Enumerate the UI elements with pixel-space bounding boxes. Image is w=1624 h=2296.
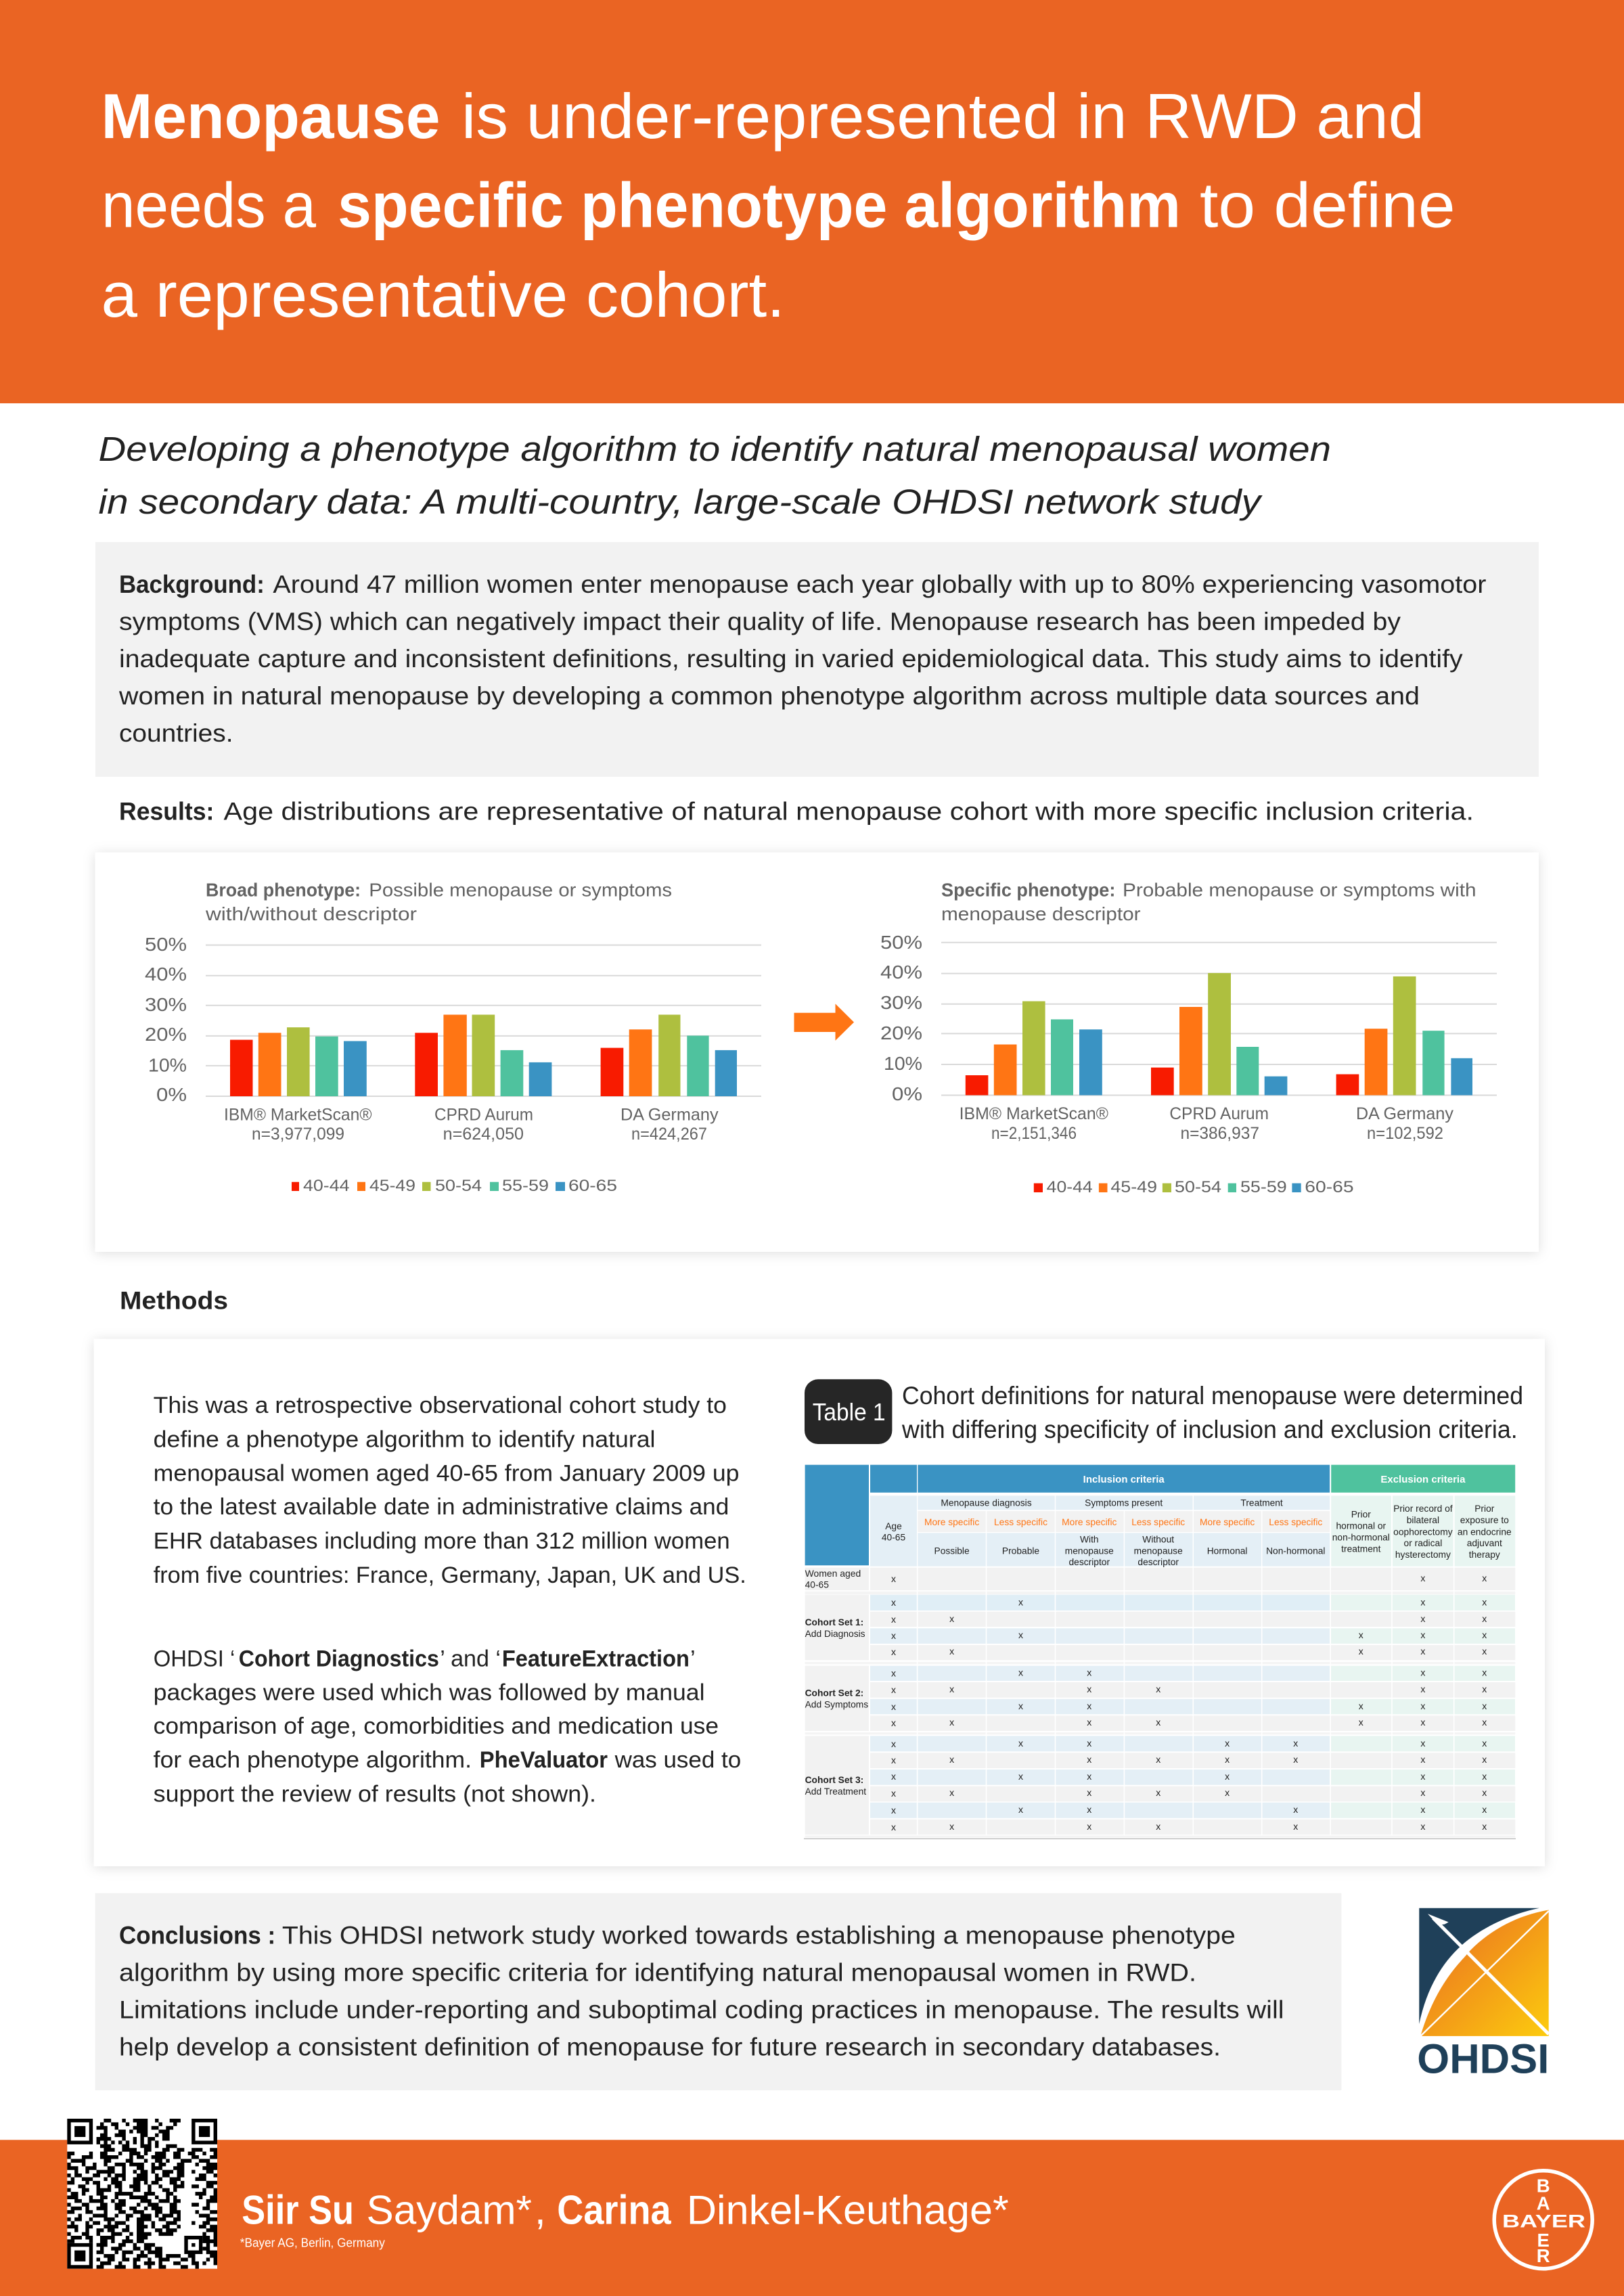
authors: ,: [535, 2188, 546, 2233]
table header: therapy: [1469, 1550, 1500, 1560]
icon: Bayer logo: E: [1537, 2230, 1550, 2251]
table x marks: x: [949, 1717, 954, 1728]
methods text: study design: define a phenotype algorithm to identify natural: [154, 1426, 655, 1452]
table body rows: Women aged: [805, 1569, 861, 1579]
table x marks: x: [1420, 1787, 1425, 1798]
bar chart: specific phenotype: 50%: [880, 932, 922, 953]
table x marks: x: [1087, 1701, 1091, 1711]
bar chart: specific phenotype: 40%: [880, 962, 922, 983]
chart legend: specific phenotype: 45-49: [1110, 1178, 1157, 1196]
table x marks: x: [1087, 1717, 1091, 1728]
QR code: [67, 2119, 217, 2269]
table body rows: Cohort Set 3:: [805, 1775, 863, 1785]
panel: background: inadequate capture and inconsistent definitions, resulting in varied epidemiological data. This study aims to identify: [119, 645, 1463, 673]
methods text: packages: FeatureExtraction: [502, 1646, 690, 1672]
table x marks: x: [1420, 1646, 1425, 1657]
bar chart: broad phenotype: 20%: [145, 1024, 187, 1045]
title: needs a: [102, 170, 317, 241]
table header: With: [1080, 1534, 1099, 1544]
methods text: packages: Cohort Diagnostics: [239, 1646, 439, 1672]
bar chart: broad phenotype: with/without descriptor: [205, 903, 417, 924]
methods text: packages: ’ and ‘: [440, 1646, 501, 1672]
bar chart: broad phenotype: 40%: [145, 964, 187, 985]
bar chart: specific phenotype: 20%: [880, 1022, 922, 1043]
table x marks: x: [891, 1597, 896, 1608]
table header: Prior: [1474, 1504, 1495, 1514]
icon: Bayer logo: [1494, 2171, 1592, 2269]
table x marks: [891, 1573, 1487, 1832]
table header: Without: [1142, 1534, 1174, 1544]
chart legend: specific phenotype: 55-59: [1240, 1178, 1287, 1196]
table x marks: x: [1156, 1787, 1160, 1798]
methods text: packages: OHDSI ‘: [154, 1646, 235, 1672]
table body rows: [804, 1567, 1516, 1839]
panel: conclusions: help develop a consistent definition of menopause for future research in secondary databases.: [119, 2033, 1221, 2061]
chart legend: broad phenotype: 60-65: [568, 1177, 617, 1195]
table x marks: x: [1087, 1684, 1091, 1694]
subtitle: Developing a phenotype algorithm to identify natural menopausal women: [99, 430, 1331, 468]
table x marks: x: [1420, 1804, 1425, 1815]
table header: hysterectomy: [1395, 1550, 1451, 1560]
table 1 badge: [805, 1379, 892, 1444]
table header: Prior record of: [1393, 1504, 1453, 1514]
table x marks: x: [1482, 1701, 1487, 1711]
table x marks: x: [1359, 1629, 1363, 1640]
panel: methods: [94, 1339, 1545, 1866]
table body rows: Add Diagnosis: [805, 1629, 865, 1639]
table x marks: x: [1482, 1804, 1487, 1815]
methods text: packages: for each phenotype algorithm.: [154, 1747, 472, 1773]
panel: background: countries.: [119, 719, 233, 747]
table header: Less specific: [1131, 1517, 1185, 1527]
bar chart: broad phenotype: n=424,267: [631, 1125, 707, 1144]
table header: Treatment: [1240, 1498, 1283, 1508]
table x marks: x: [1482, 1613, 1487, 1624]
table body rows: Cohort Set 2:: [805, 1688, 863, 1698]
methods text: study design: from five countries: France, Germany, Japan, UK and US.: [154, 1562, 746, 1588]
bar chart: broad phenotype: DA Germany: [621, 1106, 719, 1125]
table x marks: x: [891, 1701, 896, 1712]
bar chart: broad phenotype: 0%: [156, 1084, 187, 1105]
title: Menopause: [102, 81, 440, 152]
table header: treatment: [1341, 1544, 1381, 1554]
table header: menopause: [1065, 1546, 1114, 1556]
table header: More specific: [1200, 1517, 1255, 1527]
bar chart: specific phenotype: n=2,151,346: [991, 1124, 1077, 1143]
table x marks: x: [1018, 1667, 1023, 1678]
panel: conclusions: [95, 1893, 1341, 2090]
chart legend: broad phenotype: 55-59: [502, 1177, 549, 1195]
table header: hormonal or: [1336, 1521, 1386, 1531]
bar chart: broad phenotype: IBM® MarketScan®: [224, 1106, 372, 1125]
table x marks: x: [1225, 1787, 1230, 1798]
table x marks: x: [949, 1821, 954, 1832]
bar chart: broad phenotype: 30%: [145, 994, 187, 1015]
bar chart: specific phenotype: 0%: [892, 1083, 922, 1104]
table x marks: x: [1482, 1787, 1487, 1798]
authors: Carina: [557, 2188, 671, 2233]
table x marks: x: [1018, 1804, 1023, 1815]
table x marks: x: [1420, 1684, 1425, 1694]
table x marks: x: [1293, 1754, 1298, 1765]
table caption: with differing specificity of inclusion and exclusion criteria.: [901, 1416, 1518, 1443]
table x marks: x: [1420, 1701, 1425, 1711]
bar chart: broad phenotype: CPRD Aurum: [434, 1106, 533, 1125]
methods heading: Methods: [120, 1287, 228, 1314]
table x marks: x: [1156, 1821, 1160, 1832]
bar chart: specific phenotype: DA Germany: [1356, 1104, 1453, 1123]
table x marks: x: [1087, 1787, 1091, 1798]
table header: an endocrine: [1458, 1527, 1512, 1537]
table x marks: x: [1482, 1717, 1487, 1728]
table x marks: x: [891, 1738, 896, 1749]
table caption: [901, 1382, 1523, 1443]
table header: More specific: [924, 1517, 979, 1527]
table x marks: x: [1087, 1804, 1091, 1815]
table x marks: x: [1156, 1754, 1160, 1765]
table x marks: x: [949, 1754, 954, 1765]
bar chart: specific phenotype: Probable menopause or symptoms with: [1123, 880, 1476, 901]
results statement: Results:: [119, 798, 214, 826]
table header: exposure to: [1460, 1515, 1509, 1525]
table x marks: x: [1225, 1771, 1230, 1782]
authors: Saydam*: [367, 2188, 532, 2233]
bar chart: broad phenotype: Broad phenotype:: [206, 880, 361, 901]
table header: Age: [885, 1521, 902, 1531]
table x marks: x: [1359, 1717, 1363, 1728]
table x marks: x: [949, 1613, 954, 1624]
table header: non-hormonal: [1332, 1533, 1390, 1543]
footer banner: [0, 2140, 1624, 2296]
bar chart: specific phenotype: IBM® MarketScan®: [960, 1104, 1109, 1123]
table x marks: x: [1087, 1754, 1091, 1765]
icon: OHDSI logo: [1417, 1908, 1549, 2082]
authors: Siir Su: [242, 2188, 354, 2233]
table header: More specific: [1062, 1517, 1117, 1527]
table x marks: x: [891, 1667, 896, 1678]
table x marks: x: [1087, 1771, 1091, 1782]
table header: adjuvant: [1467, 1538, 1502, 1548]
table header: Probable: [1002, 1546, 1039, 1556]
methods text: packages: comparison of age, comorbidities and medication use: [154, 1713, 719, 1739]
icon: OHDSI logo: OHDSI: [1417, 2036, 1549, 2082]
table x marks: x: [1420, 1629, 1425, 1640]
bar chart: broad phenotype: 10%: [148, 1055, 187, 1076]
table x marks: x: [1482, 1646, 1487, 1657]
methods text: study design: EHR databases including more than 312 million women: [154, 1529, 730, 1554]
table x marks: x: [1482, 1684, 1487, 1694]
table x marks: x: [891, 1788, 896, 1799]
authors: Dinkel-Keuthage*: [687, 2188, 1009, 2233]
panel: background: Background:: [119, 570, 265, 598]
chart legend: specific phenotype: [1034, 1178, 1354, 1196]
table x marks: x: [1420, 1738, 1425, 1749]
table x marks: x: [1018, 1738, 1023, 1749]
icon: Bayer logo: BAYER: [1502, 2211, 1585, 2231]
table x marks: x: [891, 1805, 896, 1816]
table x marks: x: [1018, 1701, 1023, 1711]
bar chart: specific phenotype: menopause descriptor: [941, 903, 1141, 924]
table header: descriptor: [1069, 1557, 1110, 1567]
table x marks: x: [1420, 1754, 1425, 1765]
table x marks: x: [1482, 1573, 1487, 1583]
table header: bilateral: [1407, 1515, 1439, 1525]
table x marks: x: [1018, 1597, 1023, 1608]
icon: Bayer logo: B: [1537, 2176, 1550, 2197]
results statement: Age distributions are representative of natural menopause cohort with more specific inclusion criteria.: [223, 798, 1474, 826]
methods text: study design: [154, 1393, 746, 1588]
table x marks: x: [891, 1630, 896, 1641]
table body rows: Cohort Set 1:: [805, 1617, 863, 1627]
table x marks: x: [1420, 1821, 1425, 1832]
chart legend: specific phenotype: 60-65: [1305, 1178, 1354, 1196]
icon: Bayer logo: R: [1537, 2245, 1550, 2266]
table x marks: x: [1482, 1597, 1487, 1608]
table header: Menopause diagnosis: [941, 1498, 1032, 1508]
table x marks: x: [1482, 1754, 1487, 1765]
panel: background: [95, 542, 1539, 777]
table: cohort definitions: [804, 1465, 1516, 1839]
table x marks: x: [1482, 1821, 1487, 1832]
chart legend: broad phenotype: [292, 1177, 617, 1195]
bar chart: broad phenotype: n=3,977,099: [252, 1125, 344, 1144]
methods text: packages: support the review of results (not shown).: [154, 1781, 596, 1807]
table x marks: x: [1156, 1684, 1160, 1694]
table x marks: x: [1087, 1821, 1091, 1832]
methods text: packages: PheValuator: [480, 1747, 608, 1773]
table x marks: x: [891, 1646, 896, 1657]
table body rows: Add Symptoms: [805, 1700, 868, 1710]
table x marks: x: [1293, 1738, 1298, 1749]
table x marks: x: [1359, 1701, 1363, 1711]
methods text: study design: to the latest available date in administrative claims and: [154, 1494, 729, 1520]
table header: Prior: [1351, 1510, 1371, 1520]
table x marks: x: [1087, 1667, 1091, 1678]
table x marks: x: [891, 1822, 896, 1832]
bar chart: broad phenotype: Possible menopause or symptoms: [369, 880, 672, 901]
table x marks: x: [1482, 1629, 1487, 1640]
title: specific phenotype algorithm: [338, 170, 1181, 241]
methods text: packages: packages were used which was followed by manual: [154, 1680, 704, 1706]
table header: oophorectomy: [1393, 1527, 1453, 1537]
methods text: packages: [154, 1646, 741, 1807]
table 1 badge: Table 1: [813, 1398, 886, 1426]
panel: conclusions: algorithm by using more specific criteria for identifying natural menopausal women in RWD.: [119, 1959, 1196, 1987]
table x marks: x: [1482, 1771, 1487, 1782]
table x marks: x: [891, 1717, 896, 1728]
table header: menopause: [1134, 1546, 1183, 1556]
table x marks: x: [1018, 1629, 1023, 1640]
table body rows: Add Treatment: [805, 1786, 866, 1797]
methods text: study design: menopausal women aged 40-65 from January 2009 up: [154, 1460, 739, 1486]
title: to define: [1200, 170, 1456, 241]
title: a representative cohort.: [102, 259, 785, 330]
methods text: study design: This was a retrospective observational cohort study to: [154, 1393, 727, 1418]
table x marks: x: [1359, 1646, 1363, 1657]
table x marks: x: [1482, 1738, 1487, 1749]
table x marks: x: [949, 1646, 954, 1657]
table x marks: x: [891, 1573, 896, 1584]
title: is under-represented in RWD and: [461, 81, 1424, 152]
panel: conclusions: This OHDSI network study worked towards establishing a menopause phenotype: [282, 1922, 1236, 1950]
bar chart: broad phenotype: [145, 880, 761, 1195]
table x marks: x: [891, 1771, 896, 1782]
chart legend: specific phenotype: 40-44: [1047, 1178, 1093, 1196]
table body rows: 40-65: [805, 1580, 829, 1590]
chart legend: specific phenotype: 50-54: [1175, 1178, 1221, 1196]
table x marks: x: [891, 1614, 896, 1625]
table x marks: x: [1156, 1717, 1160, 1728]
panel: conclusions: Conclusions :: [119, 1922, 275, 1950]
table x marks: x: [891, 1755, 896, 1765]
bar chart: specific phenotype: Specific phenotype:: [941, 880, 1115, 901]
table x marks: x: [1420, 1597, 1425, 1608]
panel: conclusions: Limitations include under-reporting and suboptimal coding practices in menopause. The results will: [119, 1996, 1284, 2024]
panel: results charts: [95, 853, 1539, 1252]
table header: Symptoms present: [1085, 1498, 1163, 1508]
chart legend: broad phenotype: 45-49: [369, 1177, 415, 1195]
table x marks: x: [1225, 1738, 1230, 1749]
table x marks: x: [1225, 1754, 1230, 1765]
panel: background: women in natural menopause by developing a common phenotype algorithm across multiple data sources and: [118, 682, 1420, 710]
table header: descriptor: [1137, 1557, 1179, 1567]
bar chart: specific phenotype: CPRD Aurum: [1169, 1104, 1269, 1123]
methods text: packages: ’: [690, 1646, 696, 1672]
table caption: Cohort definitions for natural menopause were determined: [902, 1382, 1523, 1410]
bar chart: specific phenotype: n=102,592: [1367, 1124, 1443, 1143]
methods text: packages: was used to: [614, 1747, 741, 1773]
table header: Less specific: [1269, 1517, 1322, 1527]
header banner: [0, 0, 1624, 403]
bar chart: broad phenotype: n=624,050: [443, 1125, 524, 1144]
arrow: broad to specific: [794, 1004, 854, 1041]
table x marks: x: [891, 1684, 896, 1695]
icon: Bayer logo: A: [1537, 2193, 1550, 2214]
table header: Hormonal: [1207, 1546, 1248, 1556]
table header: or radical: [1404, 1538, 1442, 1548]
table header: [805, 1465, 1515, 1567]
table x marks: x: [1420, 1573, 1425, 1583]
title: [102, 81, 1456, 330]
table x marks: x: [949, 1684, 954, 1694]
table header: Less specific: [994, 1517, 1047, 1527]
table header: Possible: [934, 1546, 970, 1556]
table x marks: x: [949, 1787, 954, 1798]
affiliation: *Bayer AG, Berlin, Germany: [240, 2236, 385, 2250]
table header: 40-65: [882, 1533, 905, 1543]
table header: Non-hormonal: [1266, 1546, 1326, 1556]
table header: Exclusion criteria: [1380, 1474, 1466, 1485]
table x marks: x: [1482, 1667, 1487, 1678]
table x marks: x: [1018, 1771, 1023, 1782]
panel: background: Around 47 million women enter menopause each year globally with up to 80% experiencing vasomotor: [273, 570, 1486, 598]
table x marks: x: [1293, 1804, 1298, 1815]
panel: background: symptoms (VMS) which can negatively impact their quality of life. Menopause research has been impeded by: [119, 608, 1401, 635]
table x marks: x: [1420, 1771, 1425, 1782]
bar chart: specific phenotype: 30%: [880, 992, 922, 1013]
subtitle: in secondary data: A multi-country, large-scale OHDSI network study: [99, 482, 1263, 521]
chart legend: broad phenotype: 50-54: [435, 1177, 482, 1195]
bar chart: specific phenotype: 10%: [884, 1053, 922, 1074]
subtitle: [99, 430, 1331, 521]
bar chart: specific phenotype: n=386,937: [1180, 1124, 1259, 1143]
table x marks: x: [1420, 1613, 1425, 1624]
table x marks: x: [1420, 1717, 1425, 1728]
table header: Inclusion criteria: [1083, 1474, 1165, 1485]
authors: [242, 2188, 1009, 2233]
chart legend: broad phenotype: 40-44: [303, 1177, 349, 1195]
bar chart: specific phenotype: [880, 880, 1497, 1196]
table x marks: x: [1087, 1738, 1091, 1749]
table x marks: x: [1293, 1821, 1298, 1832]
bar chart: broad phenotype: 50%: [145, 934, 187, 955]
table x marks: x: [1420, 1667, 1425, 1678]
